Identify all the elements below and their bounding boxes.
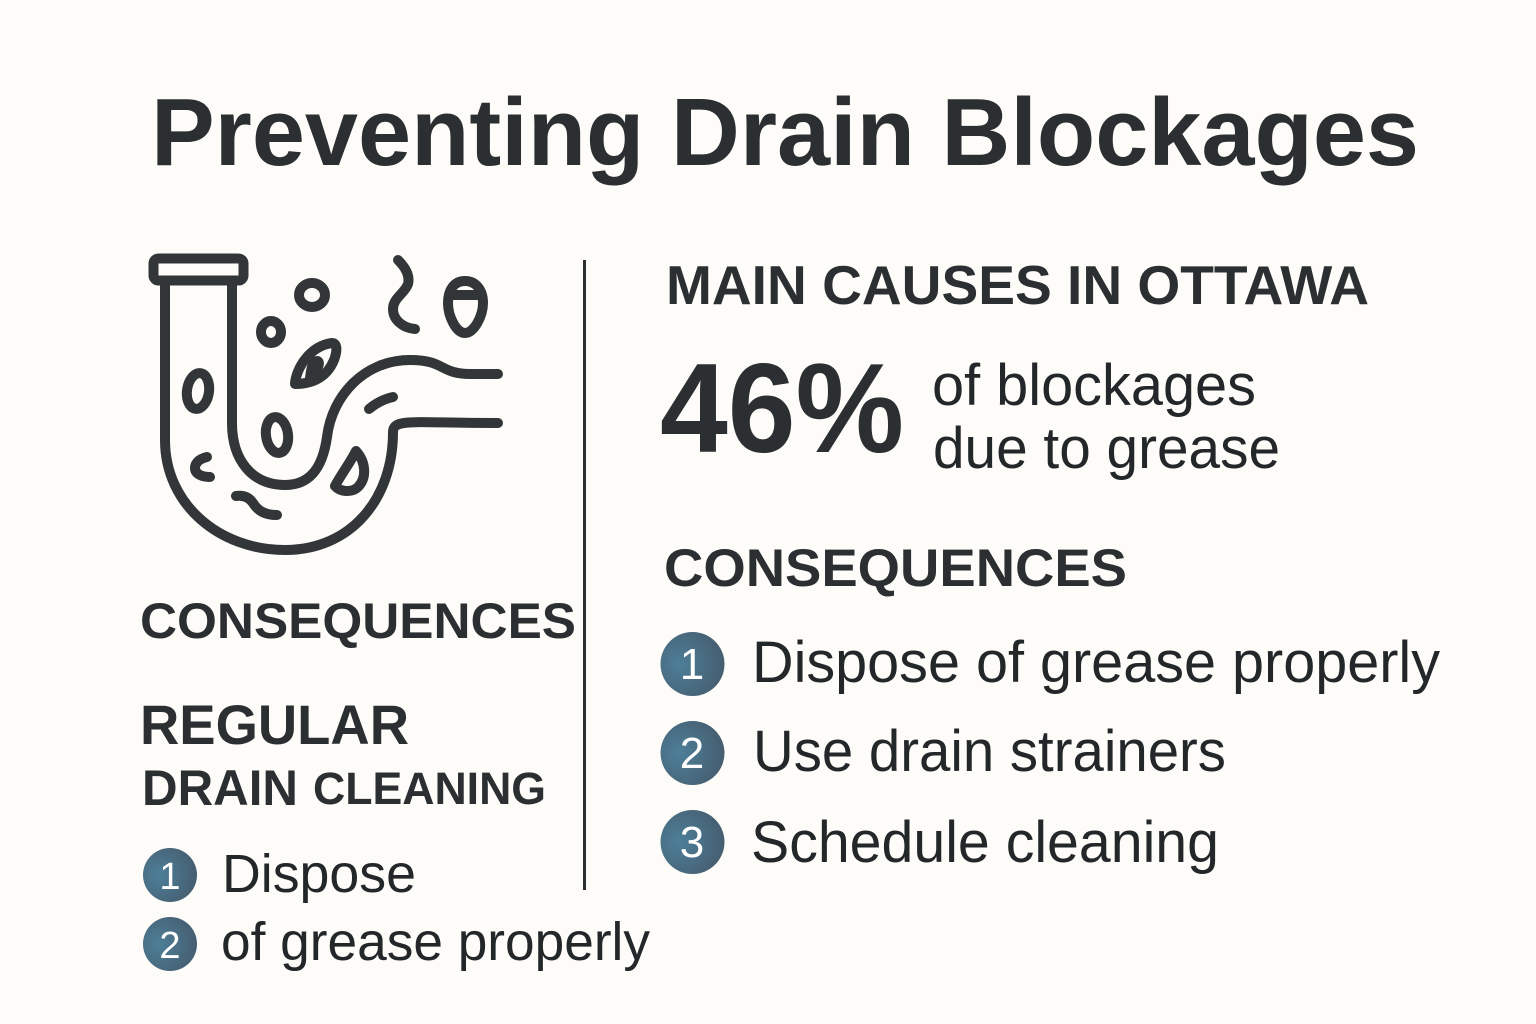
pipe outer wall — [165, 285, 498, 550]
debris — [185, 260, 483, 515]
pipe cap — [154, 258, 244, 280]
badge 2: 2 — [159, 925, 181, 967]
icon: clogged drain pipe — [154, 258, 498, 550]
heading: regular drain cleaning: REGULAR — [140, 693, 409, 756]
badge 1 — [143, 848, 197, 902]
pipe inner wall — [232, 285, 498, 485]
item: of grease properly: of grease properly — [221, 912, 650, 972]
badge 1 — [660, 632, 724, 696]
badge 2 — [660, 721, 724, 785]
heading: left consequences: CONSEQUENCES — [140, 593, 576, 649]
badge 1: 1 — [680, 640, 704, 689]
badge 2 — [143, 917, 197, 971]
item: dispose: Dispose — [222, 844, 416, 904]
badge 2: 2 — [680, 729, 704, 778]
badge 1: 1 — [159, 856, 181, 898]
statistic description — [932, 353, 1280, 481]
badge 3: 3 — [680, 818, 704, 867]
badge 3 — [660, 810, 724, 874]
heading: regular drain cleaning: DRAIN — [142, 760, 298, 816]
item: schedule cleaning: Schedule cleaning — [751, 810, 1219, 875]
right list — [660, 630, 1440, 875]
heading: regular drain cleaning: CLEANING — [313, 763, 546, 814]
heading: main causes in Ottawa: MAIN CAUSES IN OTTAWA — [666, 254, 1369, 316]
statistic description: due to grease — [933, 416, 1280, 481]
left list — [143, 844, 650, 972]
statistic description: of blockages — [932, 353, 1256, 418]
item: dispose of grease properly: Dispose of grease properly — [752, 630, 1440, 695]
item: use drain strainers: Use drain strainers — [753, 719, 1226, 784]
heading: regular drain cleaning — [140, 693, 546, 816]
heading: right consequences: CONSEQUENCES — [664, 539, 1127, 598]
statistic: 46 percent: 46% — [660, 337, 904, 479]
vertical divider — [583, 260, 586, 890]
title: Preventing Drain Blockages — [151, 79, 1419, 186]
